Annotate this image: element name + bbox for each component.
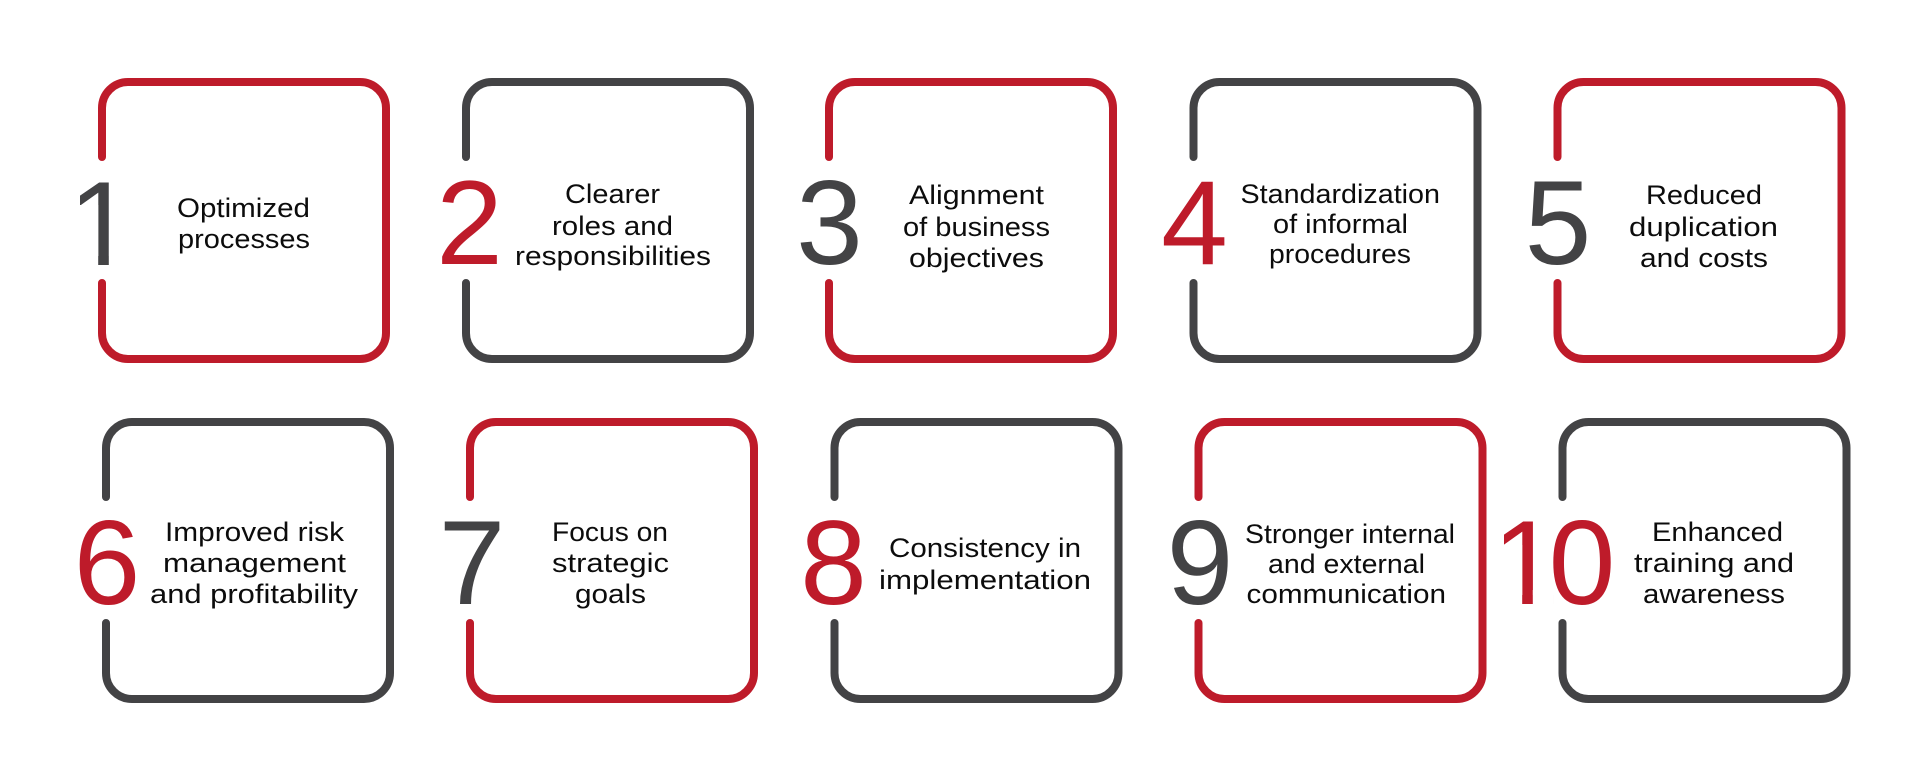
frame 9 xyxy=(1198,422,1482,699)
text 1: processes xyxy=(178,224,310,254)
text 2: roles and xyxy=(552,211,673,241)
text 9: Stronger internal xyxy=(1245,519,1455,549)
text 5: and costs xyxy=(1640,243,1768,273)
text 8: Consistency in xyxy=(889,533,1081,563)
panel: card 8 xyxy=(800,422,1118,699)
number 6: 6 xyxy=(74,496,140,630)
number 1: 1 xyxy=(68,157,135,291)
text 6: and profitability xyxy=(150,579,359,609)
frame 10 xyxy=(1562,422,1846,699)
number 10: 10 xyxy=(1492,496,1615,630)
text 9: and external xyxy=(1268,549,1425,579)
frame 4 xyxy=(1194,82,1478,359)
text 4: Standardization xyxy=(1240,179,1440,209)
text 6: Improved risk xyxy=(165,517,345,547)
panel: card 3 xyxy=(796,82,1113,359)
text 4: procedures xyxy=(1269,239,1411,269)
text 3: objectives xyxy=(909,243,1044,273)
frame 2 xyxy=(466,82,750,359)
frame 5 xyxy=(1558,82,1842,359)
frame 6 xyxy=(106,422,390,699)
panel: card 7 xyxy=(439,422,754,699)
number 8: 8 xyxy=(800,496,867,630)
text 9: communication xyxy=(1246,579,1446,609)
panel: card 4 xyxy=(1161,82,1478,359)
frame 3 xyxy=(829,82,1113,359)
number 9: 9 xyxy=(1167,496,1233,630)
frame 1 xyxy=(102,82,386,359)
text 7: strategic xyxy=(552,548,669,578)
panel: card 6 xyxy=(74,422,390,699)
panel: card 10 xyxy=(1492,422,1846,699)
number 3: 3 xyxy=(796,156,863,290)
frame 8 xyxy=(834,422,1118,699)
frame 7 xyxy=(470,422,754,699)
text 5: duplication xyxy=(1629,212,1778,242)
number 5: 5 xyxy=(1525,156,1591,290)
text 4: of informal xyxy=(1273,209,1408,239)
number 7: 7 xyxy=(439,496,505,630)
text 7: Focus on xyxy=(552,517,668,547)
panel: card 2 xyxy=(436,82,750,359)
text 10: Enhanced xyxy=(1652,517,1783,547)
text 2: responsibilities xyxy=(515,241,711,271)
panel: card 1 xyxy=(68,82,386,359)
number 2: 2 xyxy=(436,156,503,290)
text 1: Optimized xyxy=(177,193,310,223)
text 7: goals xyxy=(575,579,646,609)
number 4: 4 xyxy=(1161,156,1228,290)
text 6: management xyxy=(163,548,347,578)
text 10: training and xyxy=(1634,548,1794,578)
text 5: Reduced xyxy=(1646,180,1762,210)
text 2: Clearer xyxy=(565,179,660,209)
text 3: of business xyxy=(903,212,1050,242)
text 8: implementation xyxy=(879,565,1091,595)
panel: card 5 xyxy=(1525,82,1842,359)
text 10: awareness xyxy=(1643,579,1785,609)
text 3: Alignment xyxy=(909,180,1045,210)
panel: card 9 xyxy=(1167,422,1482,699)
